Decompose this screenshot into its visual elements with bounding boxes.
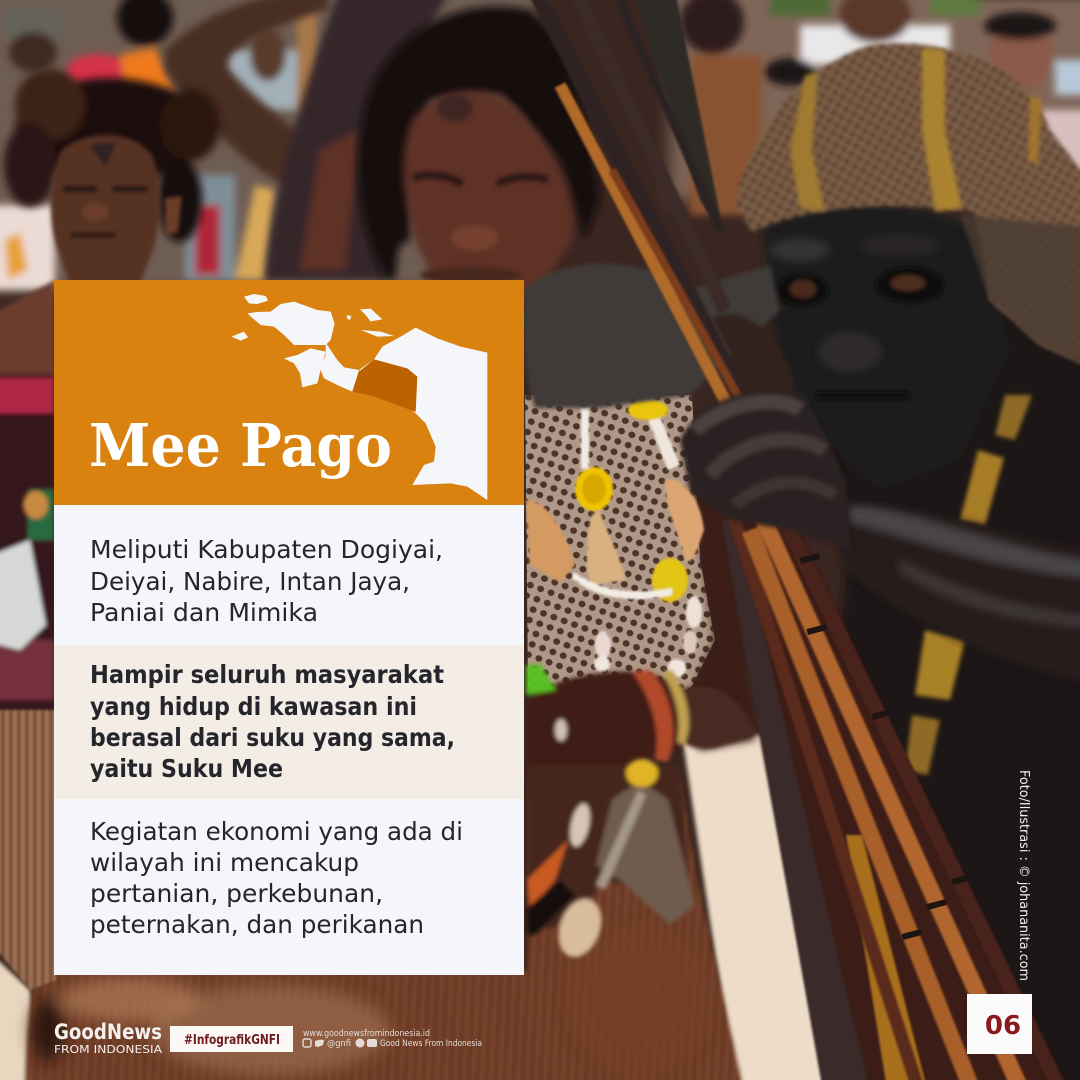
text: economy: pertanian, perkebunan, <box>90 879 383 908</box>
icons: social media <box>303 1038 377 1048</box>
man eyes and mouth <box>776 267 944 399</box>
black blade <box>722 520 875 1080</box>
text: economy <box>90 817 463 939</box>
man yellow neck strap <box>905 395 1032 775</box>
center woman hand with bracelet <box>526 664 755 775</box>
hashtag box: #InfografikGNFI <box>184 1033 280 1048</box>
lower arrows <box>733 511 1070 1080</box>
panel: economy <box>54 799 524 975</box>
center woman <box>25 7 755 1080</box>
man grey upper arm <box>523 264 780 408</box>
logo: GoodNews From Indonesia <box>54 1020 163 1056</box>
arrow bindings <box>799 553 972 940</box>
man forearm <box>830 505 1080 690</box>
text: coverage <box>90 535 443 627</box>
text: society: yaitu Suku Mee <box>90 754 283 783</box>
batik cloth behind arrows <box>846 835 935 1080</box>
center woman right arm side <box>680 470 755 750</box>
arrow bundle <box>535 0 1080 1080</box>
website and social handles: Good News From Indonesia <box>380 1039 482 1049</box>
text: society <box>90 660 455 783</box>
website and social handles: @gnfi <box>327 1039 351 1049</box>
center woman hanging shells and fibres <box>527 759 695 963</box>
right man <box>736 43 1080 1080</box>
page number: 06 <box>985 1011 1021 1041</box>
center woman hair <box>358 7 600 280</box>
man hand gripping <box>680 314 850 550</box>
upper arrows <box>535 0 740 410</box>
necklace shells <box>526 400 704 677</box>
logo: GoodNews From Indonesia: FROM INDONESIA <box>54 1044 163 1056</box>
text: society: yang hidup di kawasan ini <box>90 692 417 721</box>
text: coverage: Meliputi Kabupaten Dogiyai, <box>90 535 443 564</box>
text: economy: wilayah ini mencakup <box>90 848 359 877</box>
center woman net top <box>525 395 715 690</box>
left woman shoulder <box>0 280 55 378</box>
hashtag box <box>170 1026 293 1052</box>
left woman bag and skirt <box>0 375 56 990</box>
text: economy: Kegiatan ekonomi yang ada di <box>90 817 463 846</box>
Mee Pago region <box>352 359 417 412</box>
text: coverage: Paniai dan Mimika <box>90 598 318 627</box>
center woman grass skirt <box>25 780 750 1080</box>
website and social handles: www.goodnewsfromindonesia.id <box>303 1029 430 1039</box>
website and social handles <box>303 1029 482 1049</box>
man woven headdress <box>736 43 1080 380</box>
grass skirt left <box>0 710 56 990</box>
man body <box>762 202 1080 1080</box>
center woman face <box>403 91 573 295</box>
dark underlay of arrows <box>725 512 1080 1080</box>
text: society: Hampir seluruh masyarakat <box>90 660 444 689</box>
title: Mee Pago <box>89 411 392 480</box>
left woman <box>0 69 220 378</box>
map of Papua <box>231 294 487 500</box>
background crowd <box>0 0 1080 290</box>
left woman face <box>51 135 182 285</box>
panel: society <box>54 645 524 799</box>
man face details <box>770 235 940 372</box>
logo: GoodNews From Indonesia: GoodNews <box>54 1020 162 1044</box>
colourful woven bag <box>0 375 54 710</box>
panel: coverage <box>54 505 524 645</box>
text: society: berasal dari suku yang sama, <box>90 723 455 752</box>
photo credit: Foto/Ilustrasi : © johananita.com <box>1016 770 1031 981</box>
left woman hair <box>4 69 220 242</box>
text: coverage: Deiyai, Nabire, Intan Jaya, <box>90 567 410 596</box>
panel: header <box>54 280 524 505</box>
text: economy: peternakan, dan perikanan <box>90 910 424 939</box>
raised arm and dark garment <box>165 0 450 280</box>
center woman facial features <box>413 94 548 283</box>
page number <box>967 994 1032 1054</box>
